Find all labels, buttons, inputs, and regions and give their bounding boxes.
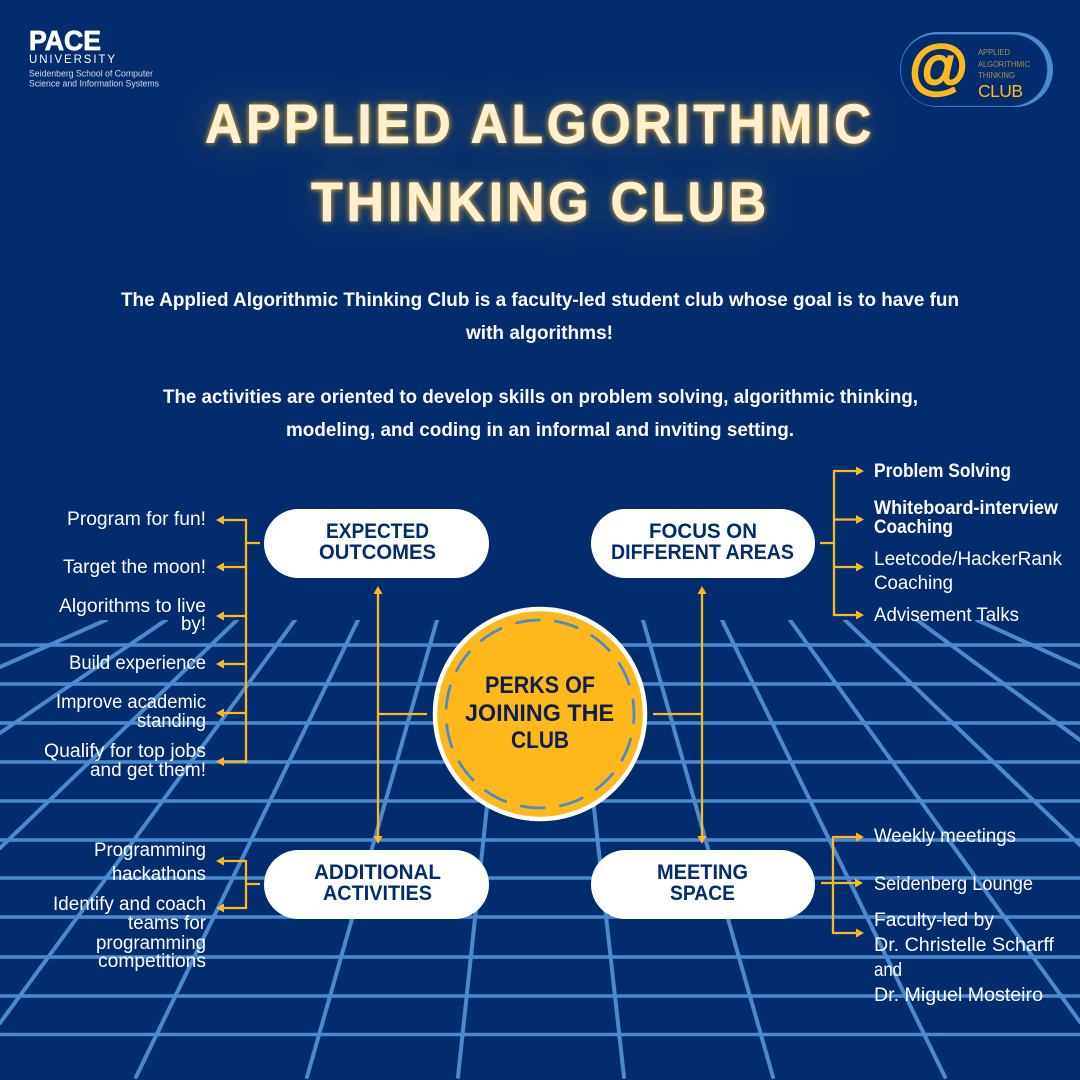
intro text block: with algorithms! xyxy=(465,322,613,344)
list: additional activities: Identify and coach xyxy=(53,894,206,915)
list: focus areas: Whiteboard-interview xyxy=(874,498,1058,519)
bracket arrows: focus areas xyxy=(820,466,864,620)
list: focus areas: Coaching xyxy=(874,573,953,594)
intro text block: The activities are oriented to develop skills on problem solving, algorithmic thinking, xyxy=(163,386,918,408)
list: additional activities: teams for xyxy=(128,913,207,934)
central circle: perks of joining the club: CLUB xyxy=(511,727,569,754)
list: expected outcomes: by! xyxy=(181,614,206,635)
Pace University logo xyxy=(29,25,159,88)
background perspective grid xyxy=(0,620,1080,1077)
central connector arrows xyxy=(374,586,706,844)
list: additional activities xyxy=(53,840,207,972)
pill: meeting space xyxy=(591,850,815,919)
list: expected outcomes: Improve academic xyxy=(56,692,206,713)
list: meeting space: Faculty-led by xyxy=(874,910,994,931)
list: expected outcomes: Qualify for top jobs xyxy=(44,741,206,762)
pill: expected outcomes: OUTCOMES xyxy=(319,541,436,564)
list: additional activities: hackathons xyxy=(112,864,206,885)
club logo: ALGORITHMIC xyxy=(978,59,1030,69)
central circle: perks of joining the club: JOINING THE xyxy=(465,700,614,727)
list: additional activities: programming xyxy=(96,933,206,954)
title xyxy=(205,92,875,233)
list: additional activities: Programming xyxy=(94,840,206,861)
Pace University logo: UNIVERSITY xyxy=(29,54,115,66)
intro text block xyxy=(121,289,959,441)
Pace University logo: Seidenberg School of Computer xyxy=(29,68,153,78)
club logo: APPLIED xyxy=(978,47,1010,57)
list: expected outcomes: and get them! xyxy=(90,760,206,781)
list: expected outcomes xyxy=(44,509,206,781)
Pace University logo: PACE xyxy=(29,25,101,56)
pill: meeting space: MEETING xyxy=(657,861,748,884)
list: expected outcomes: Target the moon! xyxy=(63,557,206,578)
club logo xyxy=(900,32,1053,107)
pill: additional activities: ACTIVITIES xyxy=(323,882,432,905)
list: focus areas: Leetcode/HackerRank xyxy=(874,549,1062,570)
list: meeting space xyxy=(874,826,1055,1006)
list: meeting space: Seidenberg Lounge xyxy=(874,874,1033,895)
pill: expected outcomes: EXPECTED xyxy=(326,520,429,543)
central circle: perks of joining the club: PERKS OF xyxy=(485,672,595,699)
pill: focus on different areas xyxy=(591,509,815,578)
pill: expected outcomes xyxy=(264,509,489,578)
pill: additional activities: ADDITIONAL xyxy=(314,861,441,884)
list: expected outcomes: Program for fun! xyxy=(67,509,206,530)
list: focus areas: Advisement Talks xyxy=(874,605,1019,626)
club logo: CLUB xyxy=(978,81,1023,101)
bracket arrows: expected outcomes xyxy=(216,516,260,766)
list: focus areas xyxy=(874,461,1062,626)
list: expected outcomes: Algorithms to live xyxy=(59,596,206,617)
list: focus areas: Problem Solving xyxy=(874,461,1011,482)
list: meeting space: and xyxy=(874,960,902,981)
list: additional activities: competitions xyxy=(98,951,206,972)
intro text block: modeling, and coding in an informal and inviting setting. xyxy=(286,419,794,441)
bracket arrows: meeting space xyxy=(821,832,864,938)
list: meeting space: Weekly meetings xyxy=(874,826,1016,847)
intro text block: The Applied Algorithmic Thinking Club is a faculty-led student club whose goal is to have fun xyxy=(121,289,959,311)
pill: focus on different areas: FOCUS ON xyxy=(649,520,757,543)
list: meeting space: Dr. Miguel Mosteiro xyxy=(874,985,1043,1006)
list: expected outcomes: Build experience xyxy=(69,653,206,674)
pill: additional activities xyxy=(264,850,489,919)
list: meeting space: Dr. Christelle Scharff xyxy=(874,935,1055,956)
list: focus areas: Coaching xyxy=(874,517,953,538)
Pace University logo: Science and Information Systems xyxy=(29,78,159,88)
pill: meeting space: SPACE xyxy=(670,882,735,905)
central circle: perks of joining the club xyxy=(435,609,645,819)
bracket arrows: additional activities xyxy=(216,856,260,912)
club logo: @ xyxy=(909,33,968,100)
title: APPLIED ALGORITHMIC xyxy=(205,92,875,155)
club logo: THINKING xyxy=(978,70,1015,80)
pill: focus on different areas: DIFFERENT AREAS xyxy=(611,541,794,564)
list: expected outcomes: standing xyxy=(137,711,206,732)
title: THINKING CLUB xyxy=(311,170,770,233)
